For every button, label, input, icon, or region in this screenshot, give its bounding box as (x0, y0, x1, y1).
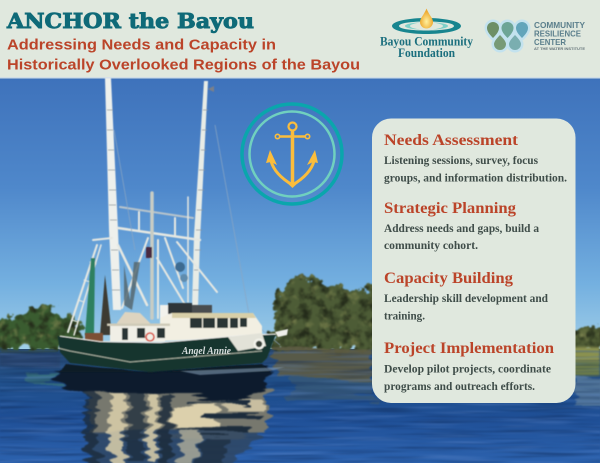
subtitle: Addressing Needs and Capacity in (7, 38, 276, 54)
boat reflection (58, 368, 270, 463)
water wake highlight (180, 367, 285, 375)
logo: Community Resilience Center: RESILIENCE (534, 28, 581, 38)
phase: Needs Assessment: groups, and information distribution. (384, 172, 567, 184)
title: ANCHOR the Bayou (6, 9, 254, 33)
phase: Strategic Planning: Address needs and gaps, build a (384, 223, 539, 235)
phase: Capacity Building: Capacity Building (384, 270, 513, 287)
phase: Project Implementation: programs and outreach efforts. (384, 381, 535, 393)
phase: Needs Assessment (384, 132, 567, 184)
phase: Strategic Planning: Strategic Planning (384, 200, 516, 217)
tree lines (0, 277, 600, 376)
logo: Community Resilience Center: CENTER (534, 37, 566, 47)
logo: Community Resilience Center (487, 20, 586, 51)
phase: Strategic Planning (384, 200, 539, 252)
logo: Bayou Community Foundation (380, 8, 474, 60)
phase: Needs Assessment: Listening sessions, survey, focus (384, 155, 539, 167)
water ripples (0, 350, 600, 463)
sky (0, 78, 600, 353)
subtitle: Historically Overlooked Regions of the Bayou (7, 58, 360, 74)
phase: Capacity Building (384, 270, 549, 322)
wheelhouse (85, 303, 288, 343)
phase: Capacity Building: Leadership skill development and (384, 293, 549, 305)
phase: Project Implementation: Develop pilot projects, coordinate (384, 364, 551, 376)
icon: five water drops (487, 22, 528, 50)
phase: Strategic Planning: community cohort. (384, 240, 478, 252)
header band (0, 0, 600, 78)
tree reflections (0, 349, 600, 406)
panel: program phases (372, 118, 576, 403)
wake (0, 353, 60, 368)
hull (58, 333, 276, 373)
icon: anchor emblem (242, 104, 342, 204)
logo: Bayou Community Foundation: Bayou Community (380, 34, 474, 48)
phase: Project Implementation (384, 340, 554, 393)
phase: Needs Assessment: Needs Assessment (384, 132, 519, 149)
boat name: Angel Annie (181, 346, 232, 357)
logo: Bayou Community Foundation: Foundation (398, 46, 455, 60)
subtitle (7, 38, 360, 74)
water (0, 349, 600, 463)
logo: Community Resilience Center: COMMUNITY (534, 20, 585, 30)
phase: Capacity Building: training. (384, 310, 425, 322)
phase: Project Implementation: Project Implementation (384, 340, 554, 357)
rigging and masts (68, 78, 280, 345)
icon: ripples and golden drop (392, 8, 461, 34)
logo: Community Resilience Center: AT THE WATER INSTITUTE (534, 47, 586, 51)
